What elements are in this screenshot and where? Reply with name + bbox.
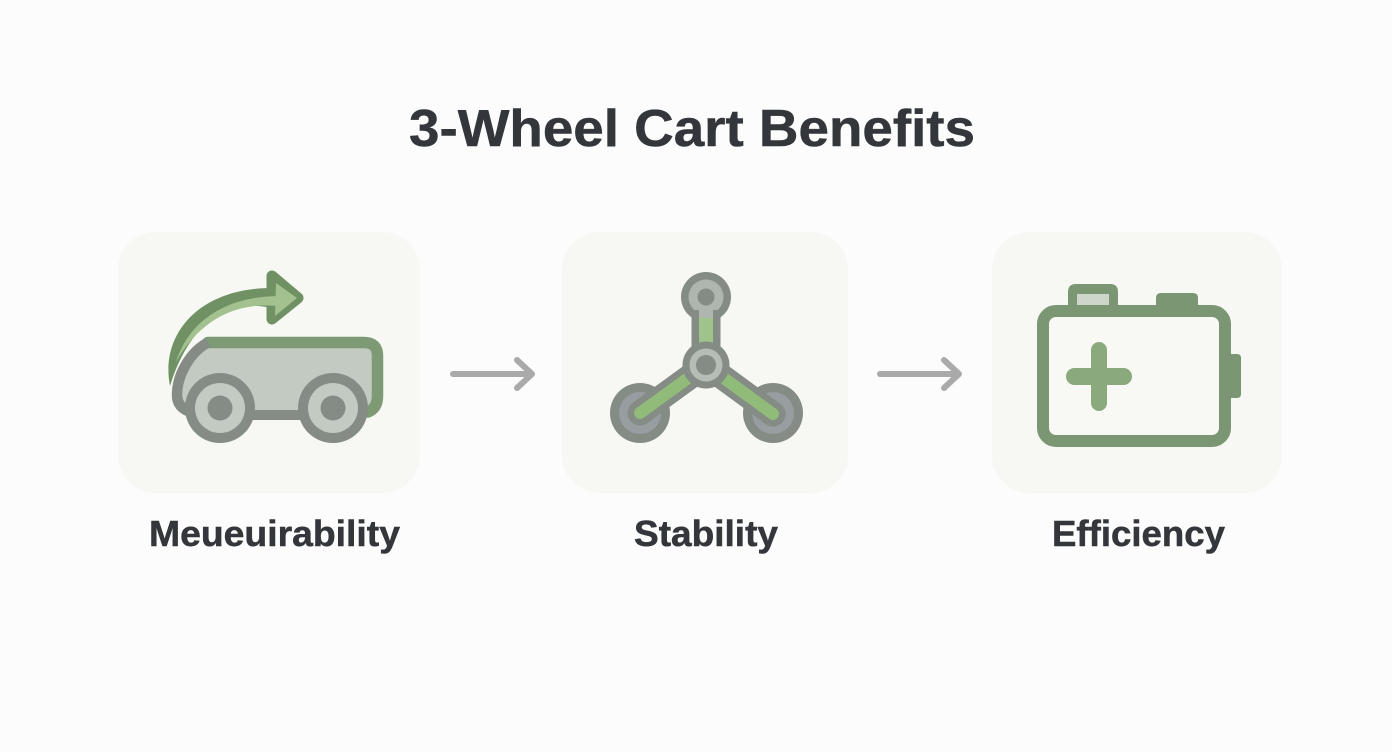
- curved arrow: [168, 276, 298, 386]
- title: 3-Wheel Cart Benefits: [409, 100, 975, 158]
- left terminal: [1068, 284, 1118, 308]
- icon: battery: [1043, 284, 1241, 441]
- front wheel: [185, 373, 255, 443]
- plus sign: [1066, 342, 1132, 411]
- panel: maneuverability: [118, 232, 420, 493]
- panel background: [562, 232, 848, 493]
- icon: three-wheel frame: [610, 272, 803, 443]
- arrow: first to second: [453, 360, 532, 388]
- icon: cart with curved arrow: [168, 276, 378, 443]
- panel: stability: [562, 232, 848, 493]
- rear wheel: [298, 373, 368, 443]
- panel background: [992, 232, 1282, 493]
- center hub: [682, 342, 730, 388]
- right wheel: [743, 383, 803, 443]
- left wheel: [610, 383, 670, 443]
- frame arms: [640, 310, 773, 414]
- side terminal: [1229, 354, 1241, 398]
- panel: efficiency: [992, 232, 1282, 493]
- panel background: [118, 232, 420, 493]
- right terminal: [1156, 293, 1198, 308]
- arrow: second to third: [880, 360, 959, 388]
- label: stability: Stability: [634, 513, 778, 554]
- label: efficiency: Efficiency: [1052, 513, 1225, 554]
- top wheel: [681, 272, 731, 322]
- label: maneuverability: Meueuirability: [149, 513, 400, 554]
- cart body: [177, 342, 378, 415]
- battery casing: [1043, 311, 1225, 441]
